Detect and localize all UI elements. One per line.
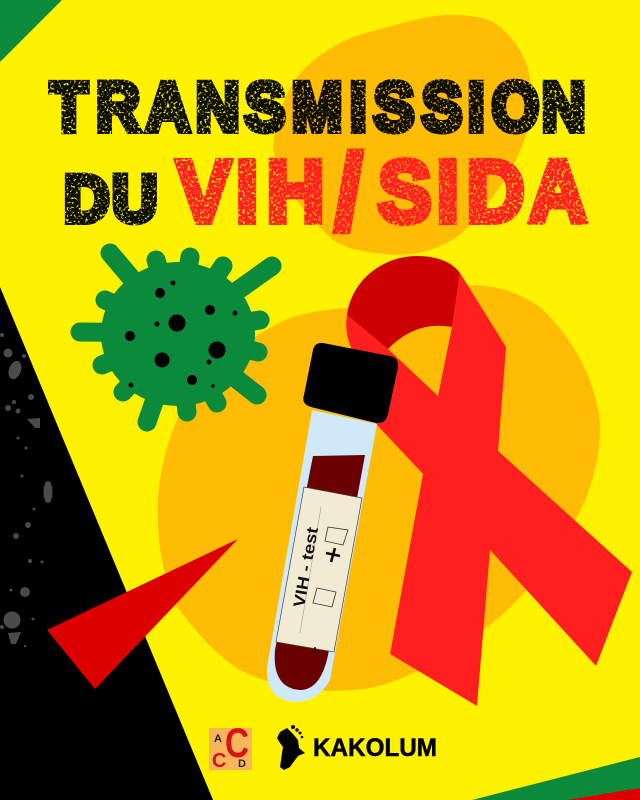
- title word VIH/SIDA: /: [335, 133, 362, 252]
- icon: blood test tube: [267, 343, 398, 702]
- logo: ACCD: C: [225, 719, 249, 766]
- title word VIH/SIDA: VIH: [177, 142, 324, 240]
- logo: ACCD: D: [238, 758, 246, 770]
- icon: Africa footprint: [277, 725, 305, 770]
- tube glass: [267, 410, 377, 702]
- test label: [276, 487, 362, 653]
- title word DU: DU: [64, 162, 157, 236]
- logo: Kakolum: [277, 725, 437, 770]
- label text: VIH - test: VIH - test: [291, 525, 322, 609]
- corner: top-left green: [0, 0, 62, 62]
- blob: orange behind title: [273, 15, 531, 255]
- blood: [275, 455, 365, 690]
- logo: Kakolum: KAKOLUM: [313, 734, 437, 762]
- logo: ACCD: C: [212, 750, 226, 772]
- plus sign: [326, 548, 340, 562]
- icon: green virus: [80, 253, 272, 422]
- black diagonal panel with speckles: [0, 287, 213, 800]
- icon: red AIDS ribbon: [346, 256, 632, 706]
- logo: ACCD: A: [214, 733, 222, 745]
- corner: bottom-right green and red: [472, 757, 640, 800]
- red triangle arrow: [47, 539, 238, 689]
- title word VIH/SIDA: SIDA: [378, 142, 587, 240]
- checkbox negative: [313, 588, 336, 607]
- logo: ACCD: [209, 719, 252, 772]
- tube cap: [303, 343, 398, 423]
- blob: large orange behind ribbon: [158, 285, 600, 691]
- title line 1: TRANSMISSION: [50, 68, 586, 145]
- checkbox positive: [325, 527, 348, 545]
- title: [50, 68, 587, 252]
